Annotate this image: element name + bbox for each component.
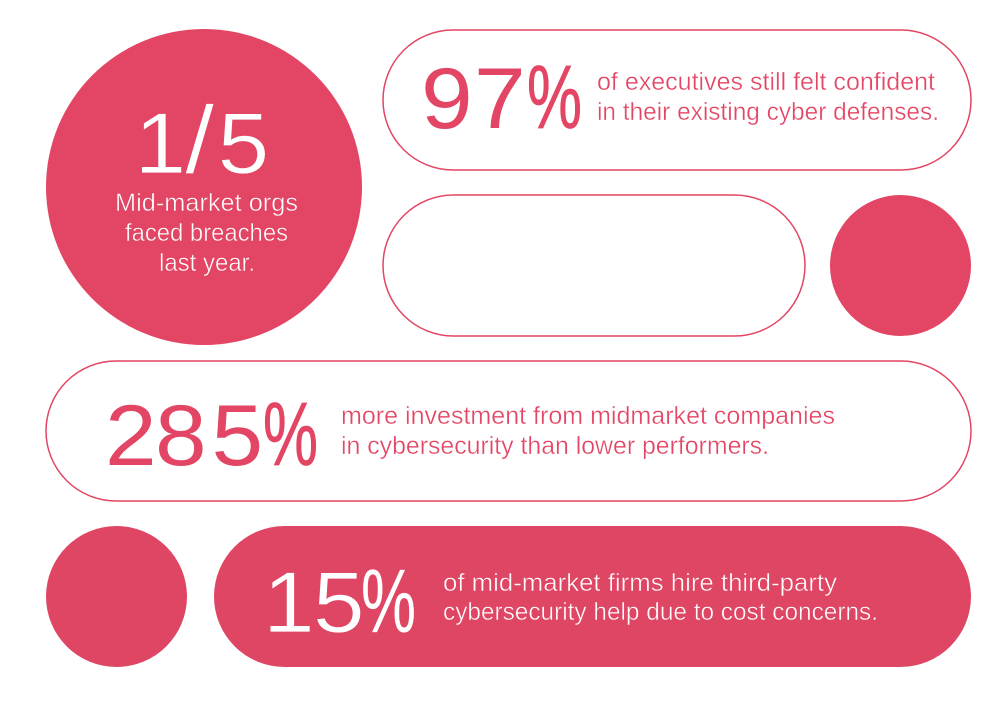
panel: small circle left — [46, 526, 187, 667]
stat: 285%: 285 — [105, 387, 263, 483]
text: third-party help: cybersecurity help due to cost concerns. — [443, 598, 878, 626]
pill outline — [46, 361, 971, 501]
text: executives confidence: in their existing cyber defenses. — [597, 98, 939, 126]
caption: mid-market orgs — [115, 189, 298, 277]
text: investment: more investment from midmarket companies — [341, 402, 835, 430]
text: investment — [341, 402, 835, 460]
stat: 97%: 97 — [421, 50, 526, 146]
stat: 97% — [421, 48, 582, 148]
caption: mid-market orgs: last year. — [159, 249, 255, 277]
text: investment: in cybersecurity than lower performers. — [341, 432, 769, 460]
caption: mid-market orgs: faced breaches — [125, 219, 288, 247]
stat: 1/5: 1 — [134, 95, 186, 191]
text: executives confidence: of executives still felt confident — [597, 68, 935, 96]
caption: mid-market orgs: Mid-market orgs — [115, 189, 298, 217]
stat: 15%: 15 — [263, 554, 365, 650]
stat: 15%: % — [361, 552, 416, 652]
stat: 15% — [263, 552, 416, 652]
panel: empty outlined pill — [383, 195, 805, 336]
stat: 97%: % — [527, 48, 582, 148]
text: third-party help — [443, 569, 878, 626]
stat: 285%: % — [263, 385, 318, 485]
text: executives confidence — [597, 68, 939, 126]
panel: 285% pill — [46, 361, 971, 501]
panel: 97% pill — [383, 30, 971, 170]
pill outline — [383, 30, 971, 170]
stat: 1/5: / — [185, 87, 214, 194]
text: third-party help: of mid-market firms hire third-party — [443, 569, 838, 597]
stat: 1/5: 5 — [218, 95, 269, 191]
panel: 15% filled pill — [214, 526, 971, 667]
circle background — [46, 29, 362, 345]
pill background — [214, 526, 971, 667]
panel: small circle right — [830, 195, 971, 336]
panel: 1/5 large circle — [46, 29, 362, 345]
